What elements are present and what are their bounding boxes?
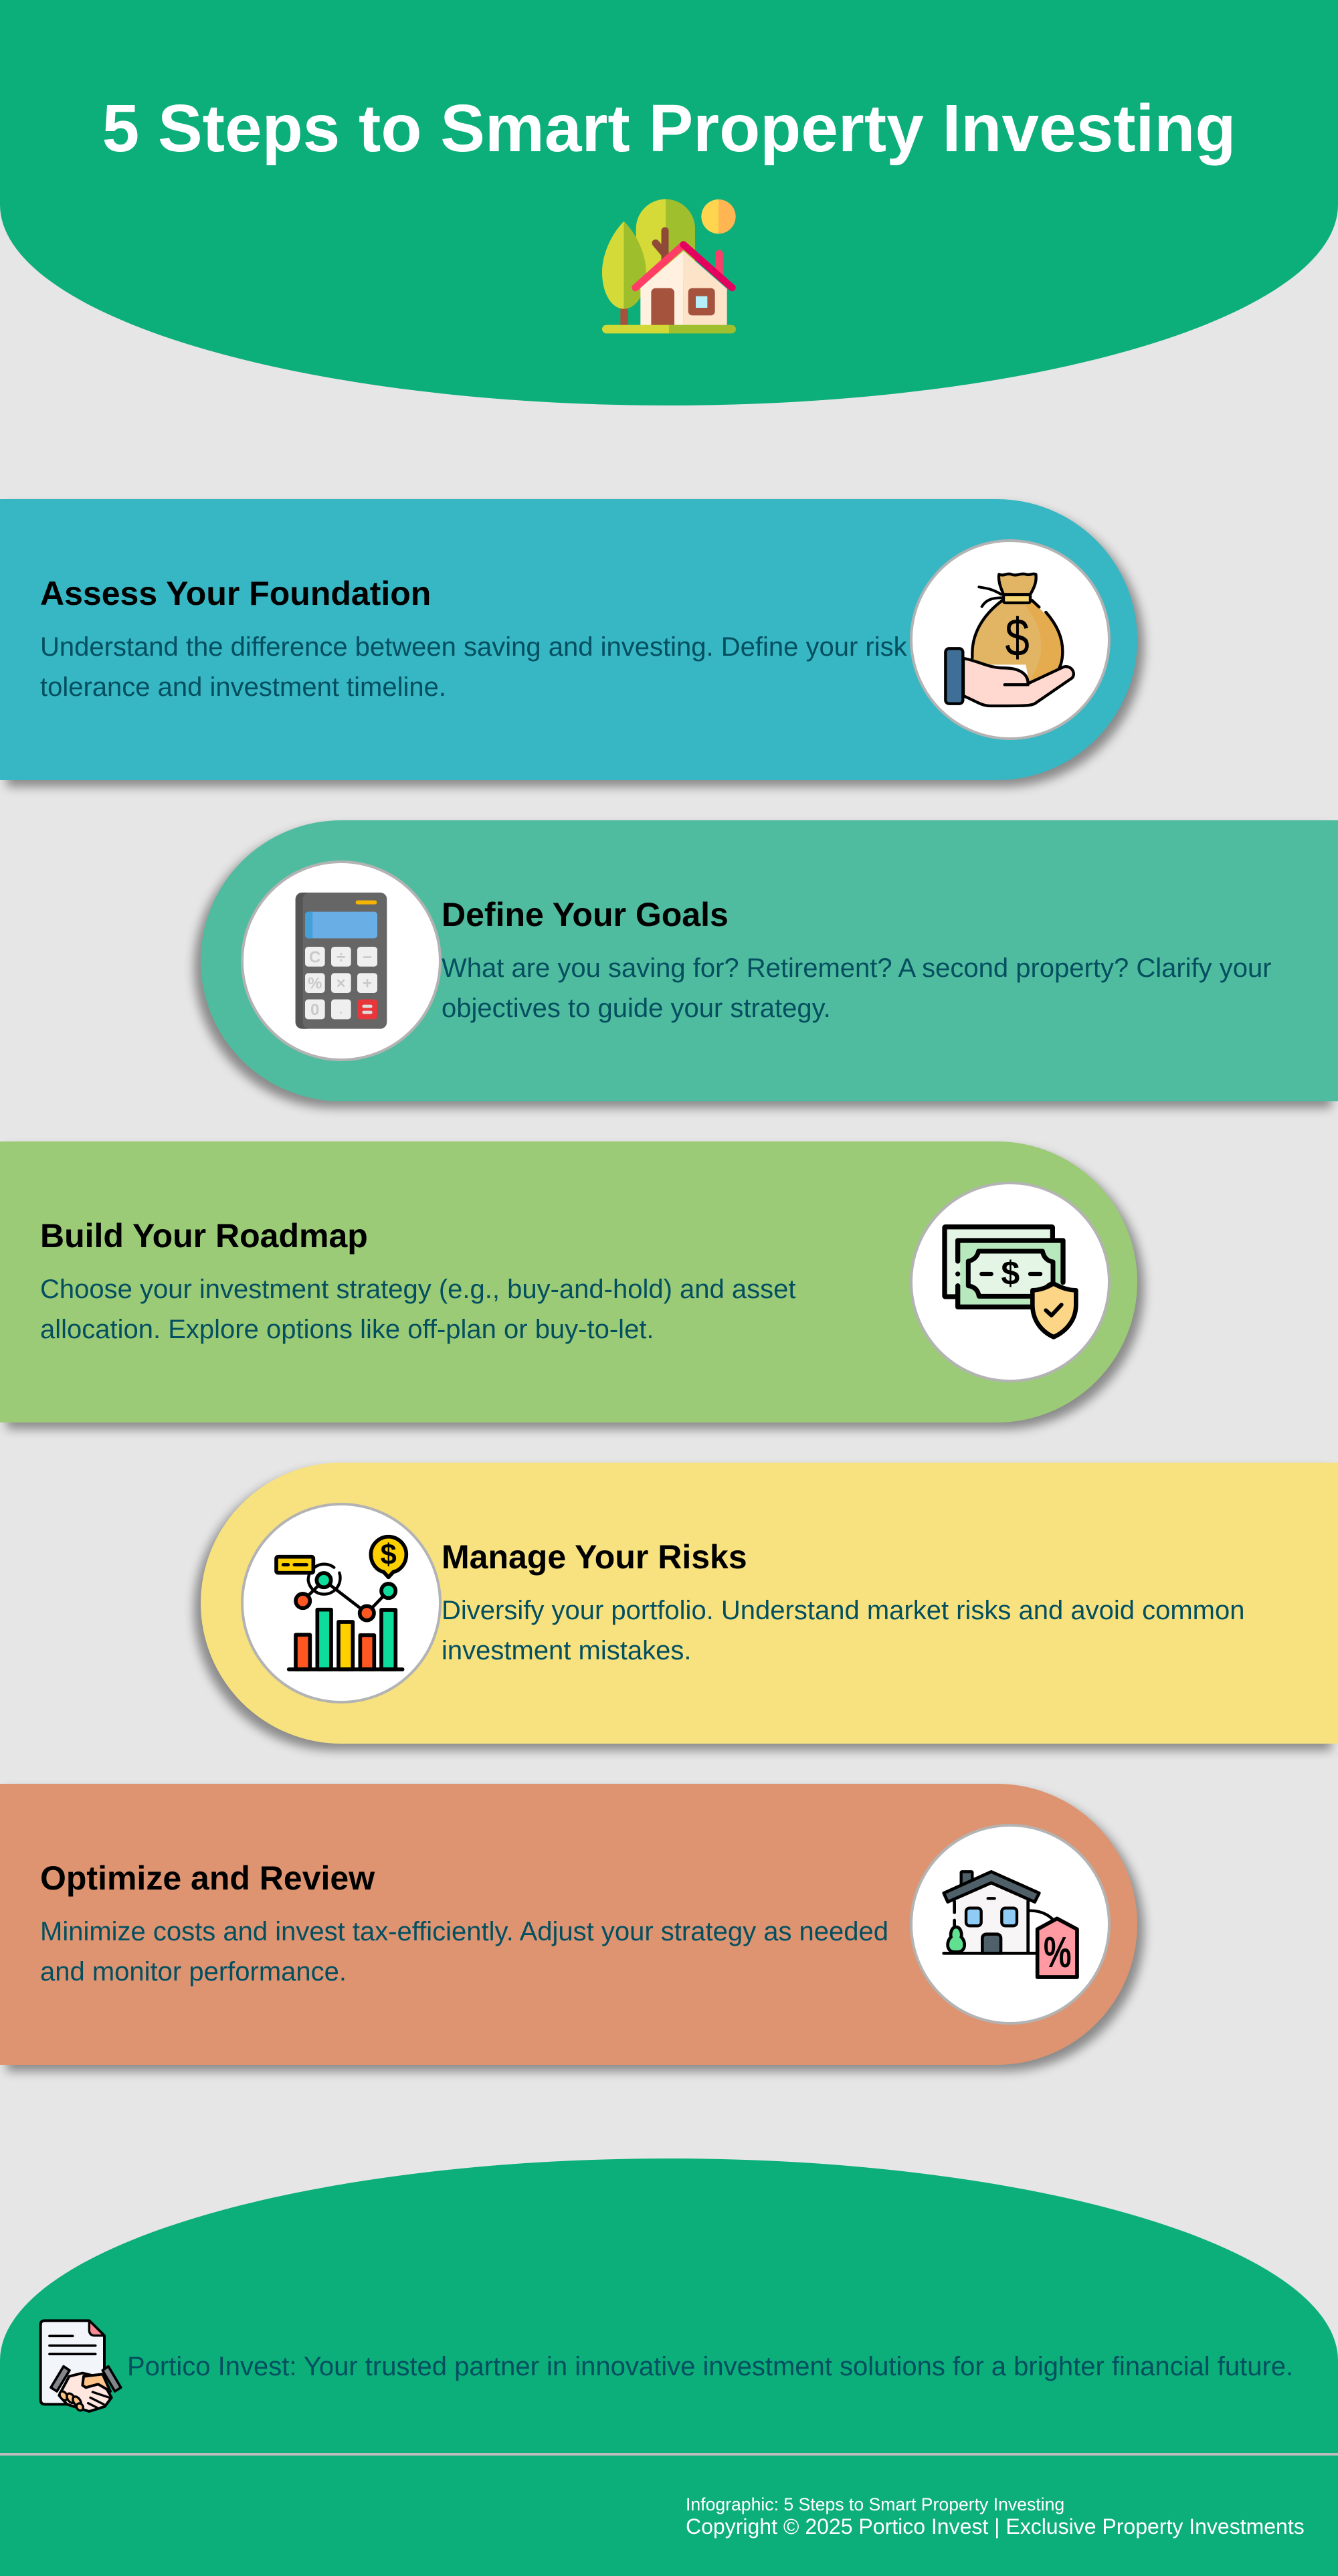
header banner <box>0 0 1338 405</box>
heading: step 1: Assess Your Foundation <box>40 575 431 612</box>
text: step 3: Choose your investment strategy (e.g., buy-and-hold) and asset <box>40 1275 796 1304</box>
text: step 2: objectives to guide your strategy. <box>442 994 831 1023</box>
text: step 1: Understand the difference between saving and investing. Define your risk <box>40 632 907 662</box>
icon: document with handshake <box>39 2319 122 2413</box>
text: step 3: allocation. Explore options like off-plan or buy-to-let. <box>40 1315 654 1344</box>
icon: house with trees and sun <box>602 199 736 333</box>
icon: calculator: % <box>308 975 322 993</box>
heading: step 5: Optimize and Review <box>40 1859 375 1897</box>
icon: calculator: ÷ <box>337 948 345 966</box>
icon: calculator: 0 <box>310 1001 319 1019</box>
text: step 4 <box>442 1596 1244 1665</box>
icon: calculator: × <box>337 975 346 993</box>
panel: step 2 define your goals <box>201 820 1338 1101</box>
icon: money bag in hand: $ <box>1005 608 1030 667</box>
panel: step 3 build your roadmap <box>0 1141 1137 1422</box>
icon: calculator: + <box>363 975 372 993</box>
icon: calculator <box>241 860 442 1061</box>
footer credits: Infographic: 5 Steps to Smart Property Investing <box>686 2494 1064 2514</box>
text: step 4: Diversify your portfolio. Understand market risks and avoid common <box>442 1596 1244 1625</box>
text: step 1: tolerance and investment timeline. <box>40 672 446 702</box>
heading: step 2: Define Your Goals <box>442 896 729 933</box>
icon: banknotes with shield: $ <box>1001 1255 1020 1292</box>
text: step 2: What are you saving for? Retirement? A second property? Clarify your <box>442 953 1272 983</box>
text: step 5: and monitor performance. <box>40 1957 347 1987</box>
panel: step 1 assess your foundation <box>0 499 1137 780</box>
icon: money bag in hand <box>910 539 1111 740</box>
panel: step 5 optimize and review <box>0 1784 1137 2065</box>
icon: bar and line chart with dollar marker: $ <box>381 1539 397 1571</box>
icon: house with percent tag: % <box>1044 1929 1071 1977</box>
icon: banknotes with shield <box>910 1182 1111 1382</box>
heading: step 4: Manage Your Risks <box>442 1538 747 1576</box>
text: step 5: Minimize costs and invest tax-efficiently. Adjust your strategy as needed <box>40 1917 888 1946</box>
icon: calculator: − <box>363 948 372 966</box>
text: step 1 <box>40 632 907 702</box>
text: step 2 <box>442 953 1272 1023</box>
heading: step 3: Build Your Roadmap <box>40 1217 368 1255</box>
company tagline: Portico Invest: Your trusted partner in innovative investment solutions for a brighter financial future. <box>127 2352 1293 2381</box>
icon: calculator: . <box>339 1004 343 1016</box>
text: step 4: investment mistakes. <box>442 1636 691 1665</box>
text: step 5 <box>40 1917 888 1987</box>
icon: house with percent tag <box>910 1824 1111 2025</box>
title: 5 Steps to Smart Property Investing <box>102 91 1236 166</box>
footer credits <box>686 2494 1305 2539</box>
icon: bar and line chart with dollar marker <box>241 1503 442 1704</box>
text: step 3 <box>40 1275 796 1344</box>
footer credits: Copyright © 2025 Portico Invest | Exclusive Property Investments <box>686 2514 1305 2539</box>
icon: calculator: C <box>309 948 320 966</box>
footer banner <box>0 2158 1338 2576</box>
panel: step 4 manage your risks <box>201 1463 1338 1744</box>
